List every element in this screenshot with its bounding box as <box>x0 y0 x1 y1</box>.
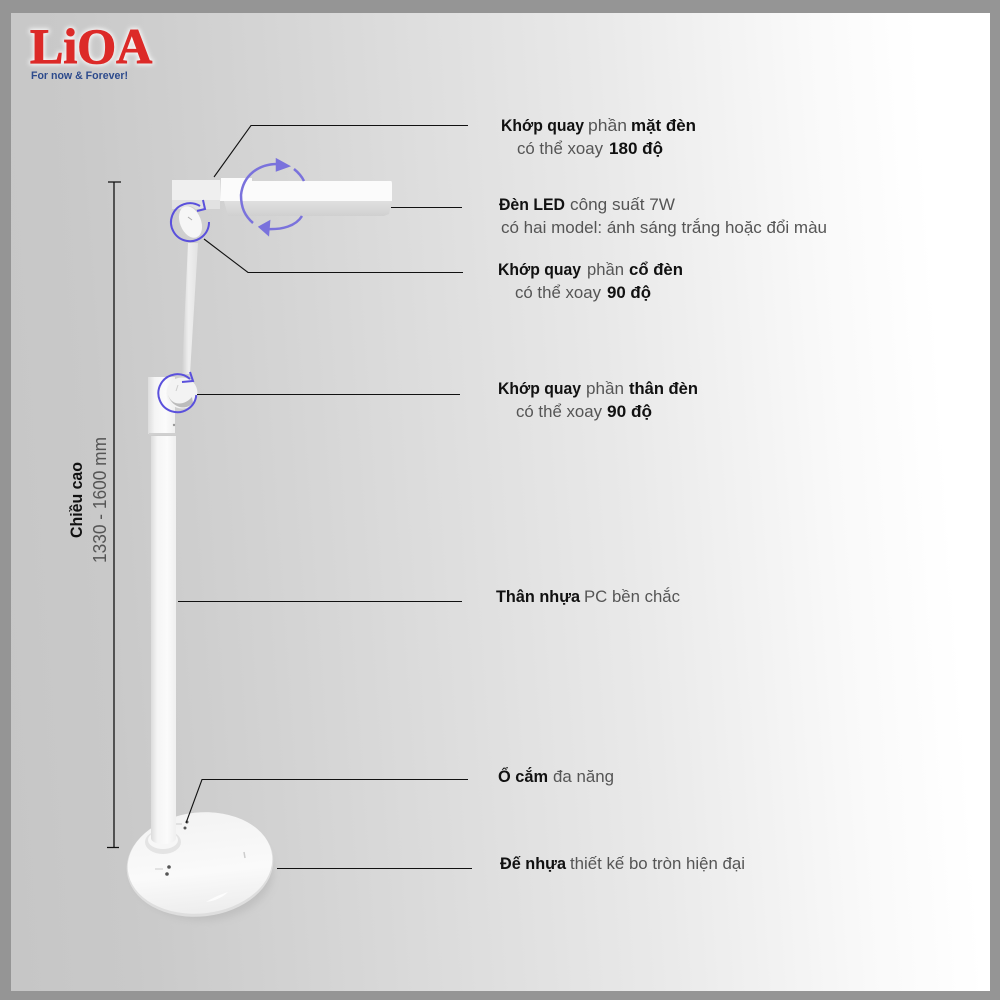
label: socket: Ổ cắm <box>498 767 548 786</box>
height dimension line <box>107 182 121 848</box>
label: socket: đa năng <box>553 767 614 786</box>
label: neck joint <box>498 260 683 302</box>
label: head joint: Khớp quay <box>501 117 585 135</box>
label: neck joint: có thể xoay <box>515 283 601 302</box>
label: head joint: có thể xoay <box>517 139 603 158</box>
label: LED lamp <box>499 195 827 237</box>
label: body joint <box>498 379 698 421</box>
joint housing <box>148 377 175 434</box>
label: neck joint: cổ đèn <box>629 261 683 279</box>
label: neck joint: phần <box>587 260 624 279</box>
label: LED lamp: có hai model: ánh sáng trắng hoặc đổi màu <box>501 218 827 237</box>
leader lines <box>178 126 472 868</box>
label: body joint: 90 độ <box>607 403 652 421</box>
neck joint arrow <box>171 200 209 241</box>
lamp base <box>121 805 279 924</box>
height label: 1330 - 1600 mm <box>90 437 110 563</box>
body joint knob <box>166 378 198 408</box>
label: body joint: phần <box>586 379 624 398</box>
label: head joint: phần <box>588 116 627 135</box>
label: body: Thân nhựa <box>496 588 581 606</box>
label: head joint: mặt đèn <box>631 117 696 135</box>
label: base: Đế nhựa <box>500 855 567 873</box>
label: neck joint: 90 độ <box>607 284 651 302</box>
height label <box>68 437 110 563</box>
label: LED lamp: công suất 7W <box>570 195 675 214</box>
body joint arrow <box>158 372 196 412</box>
logo: LiOA <box>30 18 152 74</box>
label: head joint <box>501 116 696 158</box>
label: base: thiết kế bo tròn hiện đại <box>570 854 745 873</box>
label: body joint: thân đèn <box>629 380 698 398</box>
lamp <box>121 178 392 924</box>
label: LED lamp: Đèn LED <box>499 196 565 214</box>
rotation arrows <box>158 160 304 412</box>
label: head joint: 180 độ <box>609 140 663 158</box>
label: neck joint: Khớp quay <box>498 261 582 279</box>
label: body: PC bền chắc <box>584 587 680 606</box>
height label: Chiều cao <box>68 462 86 538</box>
logo: LiOA <box>30 18 152 74</box>
lamp body pole <box>151 436 176 844</box>
label: body joint: Khớp quay <box>498 380 582 398</box>
logo: For now & Forever! <box>31 70 128 82</box>
neck arm <box>182 243 198 374</box>
neck joint knob <box>174 202 210 246</box>
head rotation arrow <box>241 160 304 234</box>
lamp head <box>172 178 392 216</box>
label: body joint: có thể xoay <box>516 402 602 421</box>
